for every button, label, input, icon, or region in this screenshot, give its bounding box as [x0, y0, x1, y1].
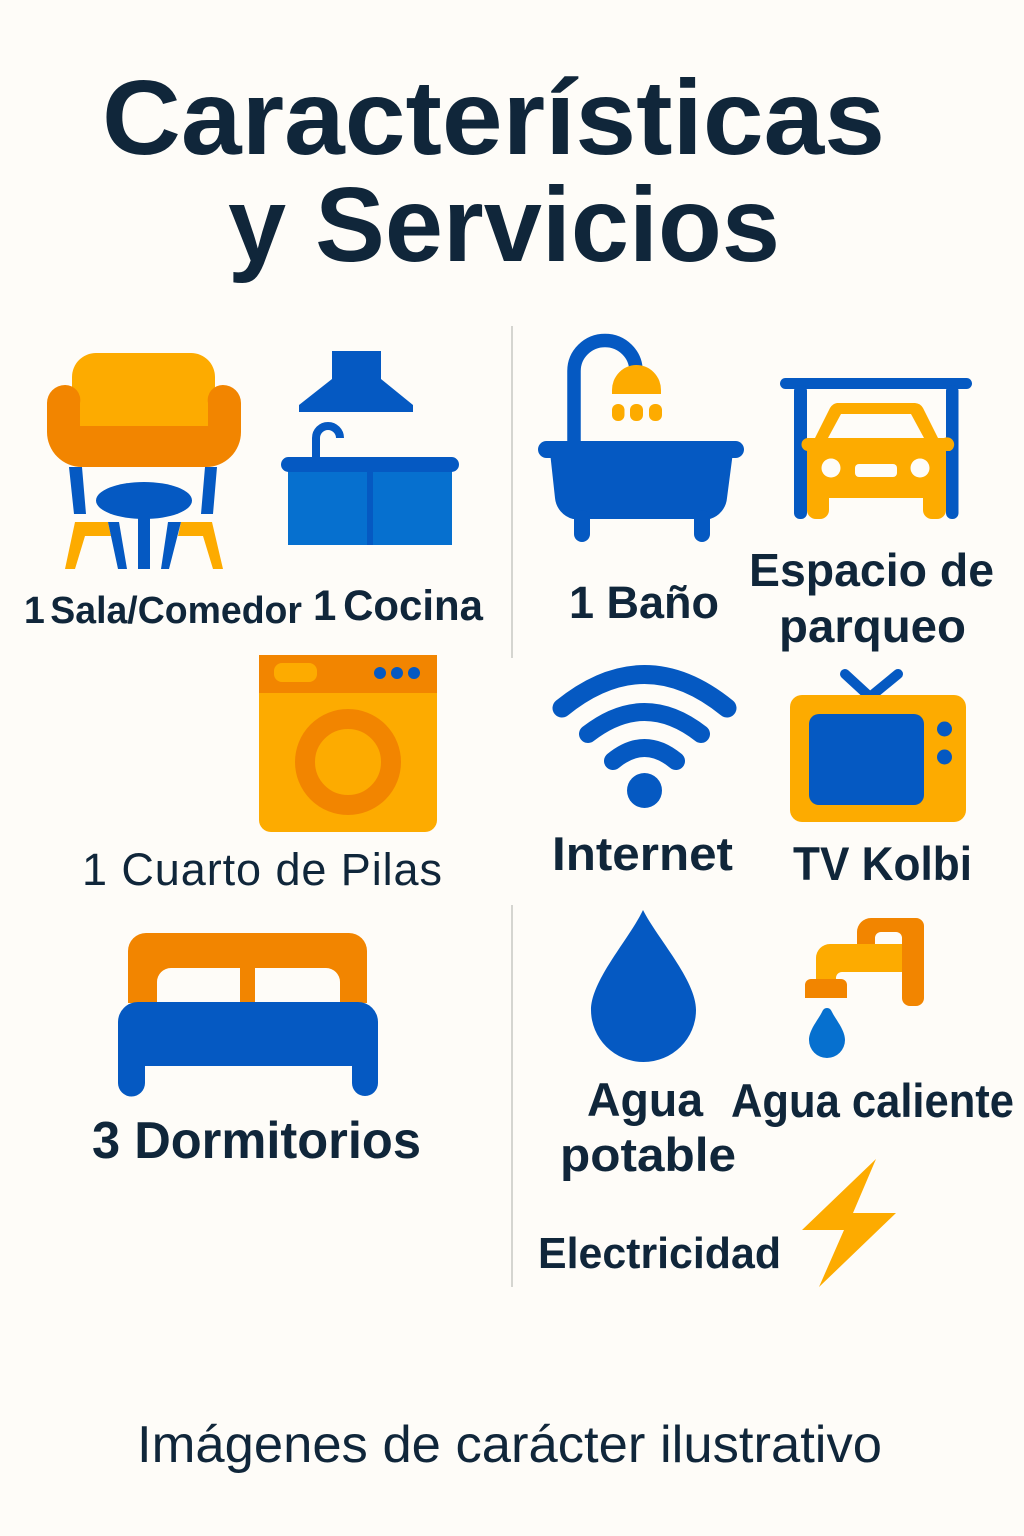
icon: wifi: [562, 674, 727, 808]
icon: lightning bolt: [802, 1159, 896, 1287]
label: Internet: Internet: [552, 827, 733, 880]
icon: water drop: [591, 910, 696, 1062]
label: 1 Cocina: 1 Cocina: [313, 582, 484, 630]
icon: washing machine: [259, 655, 437, 832]
label: Agua potable: Agua: [587, 1073, 704, 1126]
icon: hot water faucet: [805, 918, 924, 1058]
icon: television: [790, 674, 966, 822]
icon: car in carport: [780, 378, 972, 519]
label: Espacio de parqueo: parqueo: [779, 600, 966, 652]
label: Espacio de parqueo: [749, 544, 994, 652]
label: 1 Sala/Comedor: 1 Sala/Comedor: [24, 590, 302, 632]
label: TV Kolbi: TV Kolbi: [793, 837, 972, 890]
label: Agua potable: [560, 1073, 736, 1181]
title: [102, 59, 885, 284]
footer note: Imágenes de carácter ilustrativo: [137, 1416, 882, 1474]
icon: kitchen: [281, 351, 459, 545]
label: Espacio de parqueo: Espacio de: [749, 544, 994, 596]
label: 1 Cuarto de Pilas: 1 Cuarto de Pilas: [82, 844, 442, 895]
icon: bed: [118, 933, 378, 1096]
label: Agua potable: potable: [560, 1128, 736, 1181]
label: 1 Baño: 1 Baño: [569, 577, 719, 628]
label: 3 Dormitorios: 3 Dormitorios: [92, 1112, 421, 1170]
label: Electricidad: Electricidad: [538, 1229, 781, 1278]
icon: bathtub with shower: [538, 340, 744, 542]
title: Características: [102, 59, 885, 177]
title: y Servicios: [228, 166, 780, 284]
icon: sofa and dining table: [47, 353, 241, 569]
